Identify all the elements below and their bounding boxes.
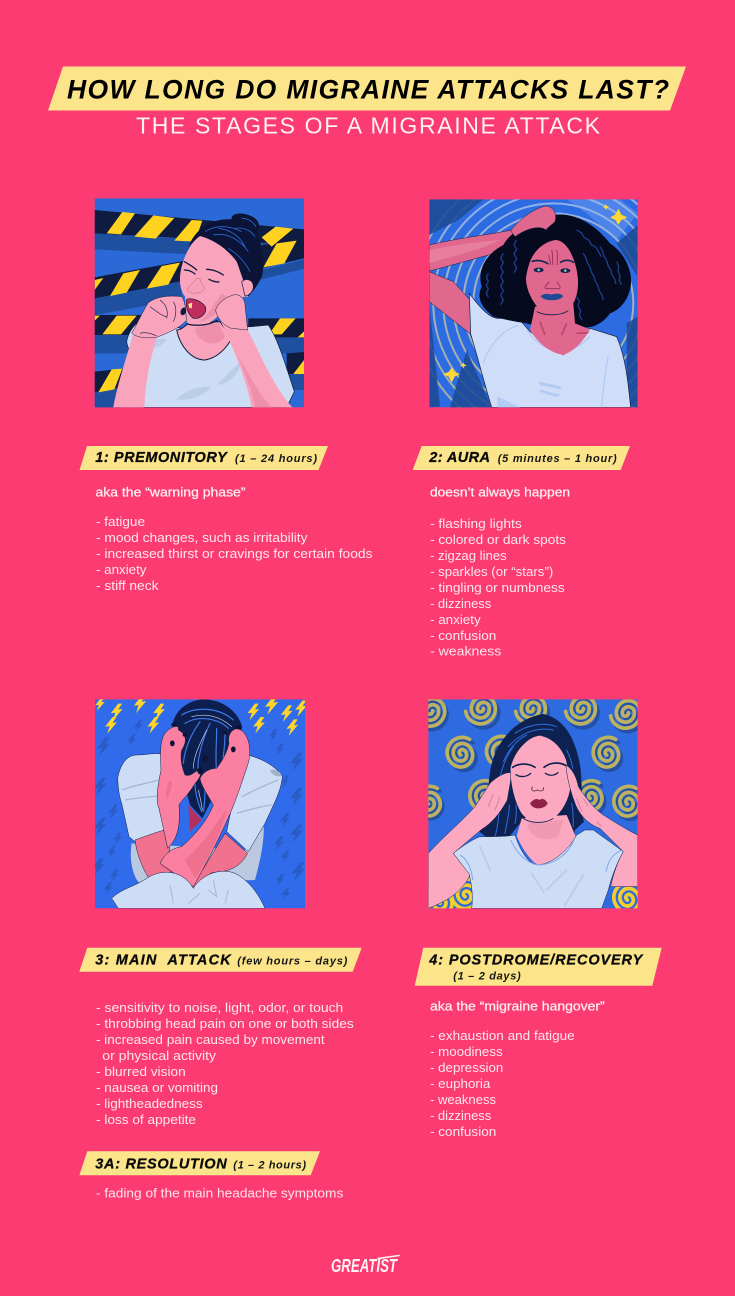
neck	[517, 815, 576, 865]
hair	[172, 699, 242, 818]
stage 3 text: - loss of appetite	[96, 1112, 196, 1127]
left arm	[428, 773, 511, 908]
hair	[479, 215, 631, 328]
stage 2 text: - weakness	[430, 644, 502, 658]
logo: Greatist: GREATIST	[331, 1256, 398, 1276]
stage 1 heading	[80, 446, 328, 470]
stage 1 text: - increased thirst or cravings for certain foods	[96, 546, 373, 561]
stage 2 heading	[413, 446, 630, 470]
spirals shadow	[412, 698, 649, 824]
spirals	[409, 694, 647, 820]
stage 3 text: or physical activity	[102, 1048, 217, 1063]
neck	[530, 303, 590, 355]
torso	[131, 823, 264, 883]
stage 3 text: - lightheadedness	[96, 1096, 203, 1111]
stage 1 text: - fatigue	[96, 514, 145, 529]
left sleeve	[118, 754, 167, 842]
stage 1 text: - stiff neck	[96, 578, 159, 593]
stage 2 text: - tingling or numbness	[430, 580, 565, 595]
stage 4 text: aka the “migraine hangover”	[430, 999, 605, 1014]
illustration: woman rubbing temples, spiral background	[428, 699, 638, 908]
stage 3 heading: (few hours – days)	[237, 955, 348, 967]
right hand and forearm	[160, 729, 250, 887]
hand in hair	[511, 206, 556, 237]
face	[511, 736, 571, 823]
stage 3A heading: (1 – 2 hours)	[233, 1159, 306, 1171]
title banner	[48, 66, 686, 110]
shirt	[469, 293, 631, 407]
stage 4 heading	[415, 948, 662, 986]
face	[526, 240, 578, 306]
crossed arms	[135, 829, 248, 888]
shirt	[127, 322, 294, 407]
stage 4 text: - dizziness	[430, 1108, 492, 1123]
stage 2 text: - flashing lights	[430, 516, 522, 531]
stage 3A text: - fading of the main headache symptoms	[96, 1186, 344, 1200]
stage 2 heading: (5 minutes – 1 hour)	[498, 453, 617, 465]
stage 3 heading	[79, 948, 362, 972]
stage 3 text: - throbbing head pain on one or both sides	[96, 1016, 354, 1031]
stage 3 text: - nausea or vomiting	[96, 1080, 218, 1095]
hair	[479, 714, 584, 849]
stage 1 text: - mood changes, such as irritability	[96, 530, 308, 545]
stage 3 text	[96, 1000, 354, 1127]
stage 2 text: - colored or dark spots	[430, 532, 567, 547]
subtitle: THE STAGES OF A MIGRAINE ATTACK	[136, 112, 601, 138]
stage 1 heading: 1: PREMONITORY	[95, 450, 228, 466]
stage 3A heading: 3A: RESOLUTION	[95, 1156, 227, 1172]
neck and chest	[177, 322, 232, 360]
title banner: HOW LONG DO MIGRAINE ATTACKS LAST?	[67, 74, 669, 104]
stage 2 heading: 2: AURA	[428, 450, 490, 466]
face	[180, 236, 248, 327]
yellow lightning bolts	[95, 695, 307, 736]
stage 4 text: - euphoria	[430, 1076, 491, 1091]
illustration: woman clutching head, lightning background	[92, 695, 307, 908]
stage 2 text	[430, 485, 570, 658]
stage 4 text: - moodiness	[430, 1044, 503, 1059]
stage 4 text: - depression	[430, 1060, 503, 1075]
stage 3 text: - increased pain caused by movement	[96, 1032, 325, 1047]
stage 4 heading: 4: POSTDROME/RECOVERY	[428, 952, 644, 968]
right sleeve	[227, 753, 282, 852]
illustration: woman with curly hair, spiral aura background	[429, 199, 638, 408]
stage 4 text: - exhaustion and fatigue	[430, 1028, 575, 1043]
stage 1 text: - anxiety	[96, 562, 147, 577]
left hand holding pill	[132, 296, 187, 338]
stage 2 text: - dizziness	[430, 596, 492, 611]
shirt	[453, 830, 623, 908]
sparkles	[443, 204, 627, 383]
lower arm	[429, 272, 471, 334]
raised arm	[429, 230, 513, 272]
left arm	[113, 333, 157, 407]
knees	[112, 871, 265, 908]
left hand and forearm	[157, 726, 201, 848]
stage 2 text: - zigzag lines	[430, 548, 507, 563]
stage 4 heading: (1 – 2 days)	[453, 970, 521, 982]
stage 4 text: - weakness	[430, 1092, 497, 1107]
right arm	[220, 320, 292, 407]
stage 2 text: - anxiety	[430, 612, 481, 627]
stage 2 text: doesn’t always happen	[430, 485, 570, 500]
stage 1 text	[96, 485, 373, 593]
stage 3 text: - sensitivity to noise, light, odor, or touch	[96, 1000, 343, 1015]
right arm	[566, 765, 638, 887]
stage 3 heading: 3: MAIN ATTACK	[95, 952, 232, 968]
stage 3A heading	[79, 1151, 320, 1175]
stage 1 heading: (1 – 24 hours)	[235, 453, 317, 465]
stage 4 text: - confusion	[430, 1124, 496, 1139]
fist right	[216, 295, 248, 330]
stage 1 text: aka the “warning phase”	[96, 485, 246, 500]
stage 2 text: - confusion	[430, 628, 496, 643]
stage 3 text: - blurred vision	[96, 1064, 186, 1079]
stage 4 text	[430, 999, 605, 1139]
hair	[188, 213, 263, 297]
illustration: woman with pill, caution tape background	[95, 198, 304, 407]
stage 2 text: - sparkles (or “stars”)	[430, 564, 553, 579]
